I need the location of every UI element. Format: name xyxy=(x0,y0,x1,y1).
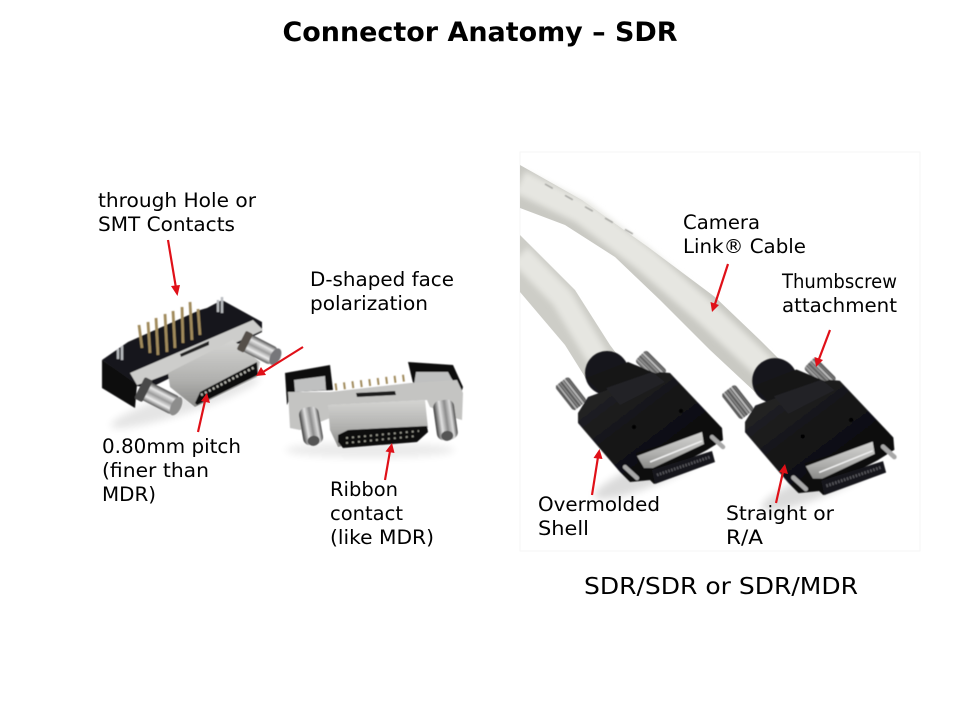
label: 0.80mm pitch: 0.80mm pitch xyxy=(102,435,241,458)
label: 0.80mm pitch: (finer than xyxy=(102,459,209,482)
arrow: ribbon contact xyxy=(385,443,394,480)
connector B: ribbon contact xyxy=(285,362,463,458)
label: thumbscrew attachment xyxy=(781,270,897,317)
label: thumbscrew attachment: attachment xyxy=(782,294,897,317)
label: thumbscrew attachment: Thumbscrew xyxy=(781,270,897,293)
label: D-shaped face polarization: polarization xyxy=(310,292,428,315)
connector: right cable plug xyxy=(721,357,894,519)
arrow: Camera Link cable xyxy=(710,264,728,312)
label: Camera Link cable: Camera xyxy=(683,211,760,234)
label: ribbon contact xyxy=(330,478,434,549)
arrow: thumbscrew xyxy=(814,330,830,367)
panel: SDR connector photos xyxy=(102,297,463,458)
arrow: straight or R/A xyxy=(776,464,788,503)
label: overmolded shell xyxy=(538,493,660,540)
label: overmolded shell: Overmolded xyxy=(538,493,660,516)
label: through hole or SMT contacts: SMT Contacts xyxy=(98,213,235,236)
label: straight or R/A: R/A xyxy=(726,526,764,549)
arrow: through hole contacts xyxy=(168,240,180,296)
title: Connector Anatomy – SDR xyxy=(282,17,678,48)
label: ribbon contact: (like MDR) xyxy=(330,526,434,549)
arrow: overmolded shell xyxy=(592,449,602,495)
connector A: right-angle through hole xyxy=(102,297,284,437)
label: 0.80mm pitch: MDR) xyxy=(102,483,156,506)
arrow: D-shaped face xyxy=(256,347,303,376)
label: ribbon contact: Ribbon xyxy=(330,478,398,501)
connector: left cable plug xyxy=(555,350,723,508)
label: D-shaped face polarization xyxy=(310,268,454,315)
label: 0.80mm pitch xyxy=(102,435,241,506)
label: through hole or SMT contacts xyxy=(98,189,257,236)
label: straight or R/A: Straight or xyxy=(726,502,835,525)
cable: second white cable xyxy=(520,235,616,379)
label: through hole or SMT contacts: through Hole or xyxy=(98,189,257,212)
label: ribbon contact: contact xyxy=(330,502,403,525)
label: Camera Link cable xyxy=(683,211,806,258)
cable: first white cable xyxy=(520,165,790,392)
arrow: 0.80mm pitch xyxy=(198,393,210,432)
label: Camera Link cable: Link® Cable xyxy=(683,235,806,258)
caption: SDR/SDR or SDR/MDR xyxy=(584,574,858,600)
label: overmolded shell: Shell xyxy=(538,517,589,540)
panel: cable photo xyxy=(520,152,920,551)
label: straight or R/A xyxy=(726,502,835,549)
label: D-shaped face polarization: D-shaped face xyxy=(310,268,454,291)
